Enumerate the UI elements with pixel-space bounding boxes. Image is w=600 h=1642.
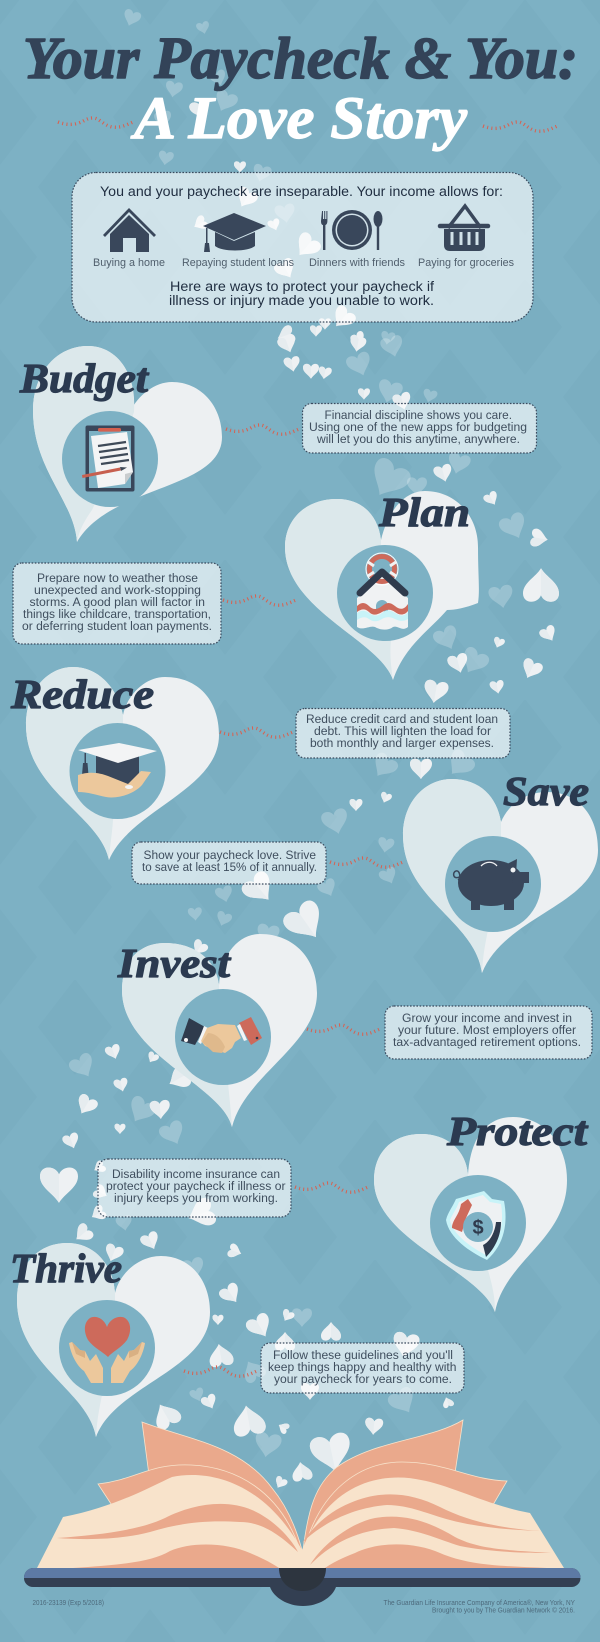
- title line 2: A Love Story: [130, 85, 467, 151]
- icon: lifebuoy and house: [357, 553, 408, 630]
- spine: [270, 1587, 336, 1606]
- save squiggle: [330, 858, 403, 867]
- plan heading: Plan: [378, 489, 470, 535]
- footer credit: [384, 1598, 575, 1614]
- invest heart: [122, 934, 317, 1127]
- protect icon circle: [430, 1175, 526, 1271]
- footer credit: Brought to you by The Guardian Network © 2016.: [432, 1606, 575, 1614]
- cover top band: [24, 1568, 580, 1578]
- open book: [24, 1420, 581, 1606]
- icon: shield with dollar: $: [472, 1217, 484, 1239]
- protect callout: protect your paycheck if illness or: [106, 1179, 286, 1193]
- invest callout: Grow your income and invest in: [402, 1011, 572, 1025]
- thrive callout: keep things happy and healthy with: [268, 1360, 456, 1374]
- intro heading: You and your paycheck are inseparable. Your income allows for:: [100, 184, 503, 199]
- right cream pages: [302, 1477, 564, 1568]
- reduce callout: [296, 708, 510, 758]
- plan callout: [13, 563, 221, 644]
- reduce icon circle: [70, 723, 166, 819]
- thrive callout: [261, 1343, 464, 1393]
- protect callout: [98, 1159, 291, 1217]
- protect callout: injury keeps you from working.: [114, 1191, 278, 1205]
- label: loans: Repaying student loans: [182, 257, 294, 269]
- icon: shield with dollar: [446, 1191, 506, 1260]
- section: protect: [98, 1108, 589, 1312]
- save callout: [132, 842, 326, 884]
- protect heart: [374, 1117, 567, 1312]
- budget callout: Financial discipline shows you care.: [324, 408, 512, 422]
- thrive squiggle: [184, 1367, 257, 1376]
- save callout: Show your paycheck love. Strive: [144, 848, 316, 862]
- reduce squiggle: [220, 728, 293, 737]
- thrive icon circle: [59, 1300, 155, 1396]
- right back page: [303, 1420, 463, 1550]
- thrive callout: Follow these guidelines and you'll: [273, 1348, 453, 1362]
- invest callout: tax-advantaged retirement options.: [393, 1035, 581, 1049]
- icon: piggy bank: [454, 859, 529, 910]
- label: dinners: Dinners with friends: [309, 257, 405, 269]
- plan callout: storms. A good plan will factor in: [30, 595, 205, 609]
- section: reduce: [10, 667, 510, 860]
- right page lower stripe: [310, 1517, 551, 1565]
- thrive heart: [17, 1243, 210, 1437]
- right bottom hump: [325, 1544, 547, 1568]
- invest callout: [385, 1006, 592, 1059]
- thrive heading: Thrive: [10, 1245, 122, 1291]
- plan callout: unexpected and work-stopping: [34, 583, 201, 597]
- right second page: [304, 1462, 507, 1550]
- icon: handshake: [181, 1017, 262, 1053]
- label: home: Buying a home: [93, 257, 165, 269]
- reduce heading: Reduce: [10, 671, 154, 717]
- section: plan: [13, 489, 479, 680]
- label: groceries: Paying for groceries: [418, 257, 514, 269]
- invest squiggle: [307, 1025, 380, 1034]
- plan icon circle: [337, 545, 433, 641]
- left page stripe: [57, 1504, 298, 1552]
- section: invest: [117, 934, 592, 1127]
- invest icon circle: [175, 989, 271, 1085]
- icon: shopping basket: [440, 206, 488, 251]
- intro closing text line 2: illness or injury made you unable to work.: [169, 293, 434, 308]
- icon: plate and cutlery: [321, 210, 382, 250]
- budget callout: will let you do this anytime, anywhere.: [316, 432, 520, 446]
- section: thrive: [10, 1243, 464, 1437]
- icon: cap in hand: [78, 743, 157, 797]
- left back page: [142, 1422, 302, 1550]
- plan callout: or deferring student loan payments.: [22, 619, 212, 633]
- protect heading: Protect: [446, 1108, 589, 1154]
- book cover: [24, 1568, 581, 1587]
- footer code: 2016-23139 (Exp 5/2018): [32, 1598, 104, 1607]
- reduce heart: [26, 667, 219, 860]
- save heading: Save: [503, 768, 589, 814]
- reduce callout: both monthly and larger expenses.: [310, 736, 494, 750]
- plan squiggle: [223, 596, 296, 605]
- right page upper stripe: [302, 1494, 540, 1543]
- budget callout: Using one of the new apps for budgeting: [309, 420, 527, 434]
- left bottom hump: [73, 1544, 279, 1568]
- budget heading: Budget: [19, 355, 150, 401]
- budget heart: [33, 346, 222, 542]
- save heart: [403, 779, 598, 973]
- budget squiggle: [226, 425, 299, 434]
- title line 1: Your Paycheck & You:: [23, 25, 578, 91]
- left second page: [98, 1465, 300, 1550]
- budget callout: [302, 404, 536, 453]
- spine inner: [279, 1568, 326, 1591]
- reduce callout: debt. This will lighten the load for: [314, 724, 491, 738]
- intro panel: [72, 172, 533, 322]
- icon: hands holding heart: [69, 1317, 145, 1383]
- save callout: to save at least 15% of it annually.: [142, 860, 317, 874]
- icon: clipboard: [82, 426, 134, 492]
- invest heading: Invest: [117, 940, 232, 986]
- thrive callout: your paycheck for years to come.: [274, 1372, 452, 1386]
- invest callout: your future. Most employers offer: [398, 1023, 576, 1037]
- icon: graduation cap: [203, 213, 266, 252]
- intro closing text: Here are ways to protect your paycheck if: [170, 279, 434, 294]
- right title squiggle: [483, 122, 557, 131]
- reduce callout: Reduce credit card and student loan: [306, 712, 498, 726]
- section: save: [132, 768, 598, 973]
- protect squiggle: [295, 1183, 368, 1192]
- decorative falling hearts: [40, 8, 559, 1491]
- left title squiggle: [58, 118, 133, 127]
- plan heart: [285, 491, 479, 680]
- icon: house: [103, 208, 156, 252]
- section: budget: [19, 346, 537, 542]
- plan callout: Prepare now to weather those: [37, 571, 198, 585]
- left cream pages: [37, 1475, 302, 1568]
- save icon circle: [445, 836, 541, 932]
- plan callout: things like childcare, transportation,: [23, 607, 211, 621]
- budget icon circle: [62, 411, 158, 507]
- protect callout: Disability income insurance can: [112, 1167, 280, 1181]
